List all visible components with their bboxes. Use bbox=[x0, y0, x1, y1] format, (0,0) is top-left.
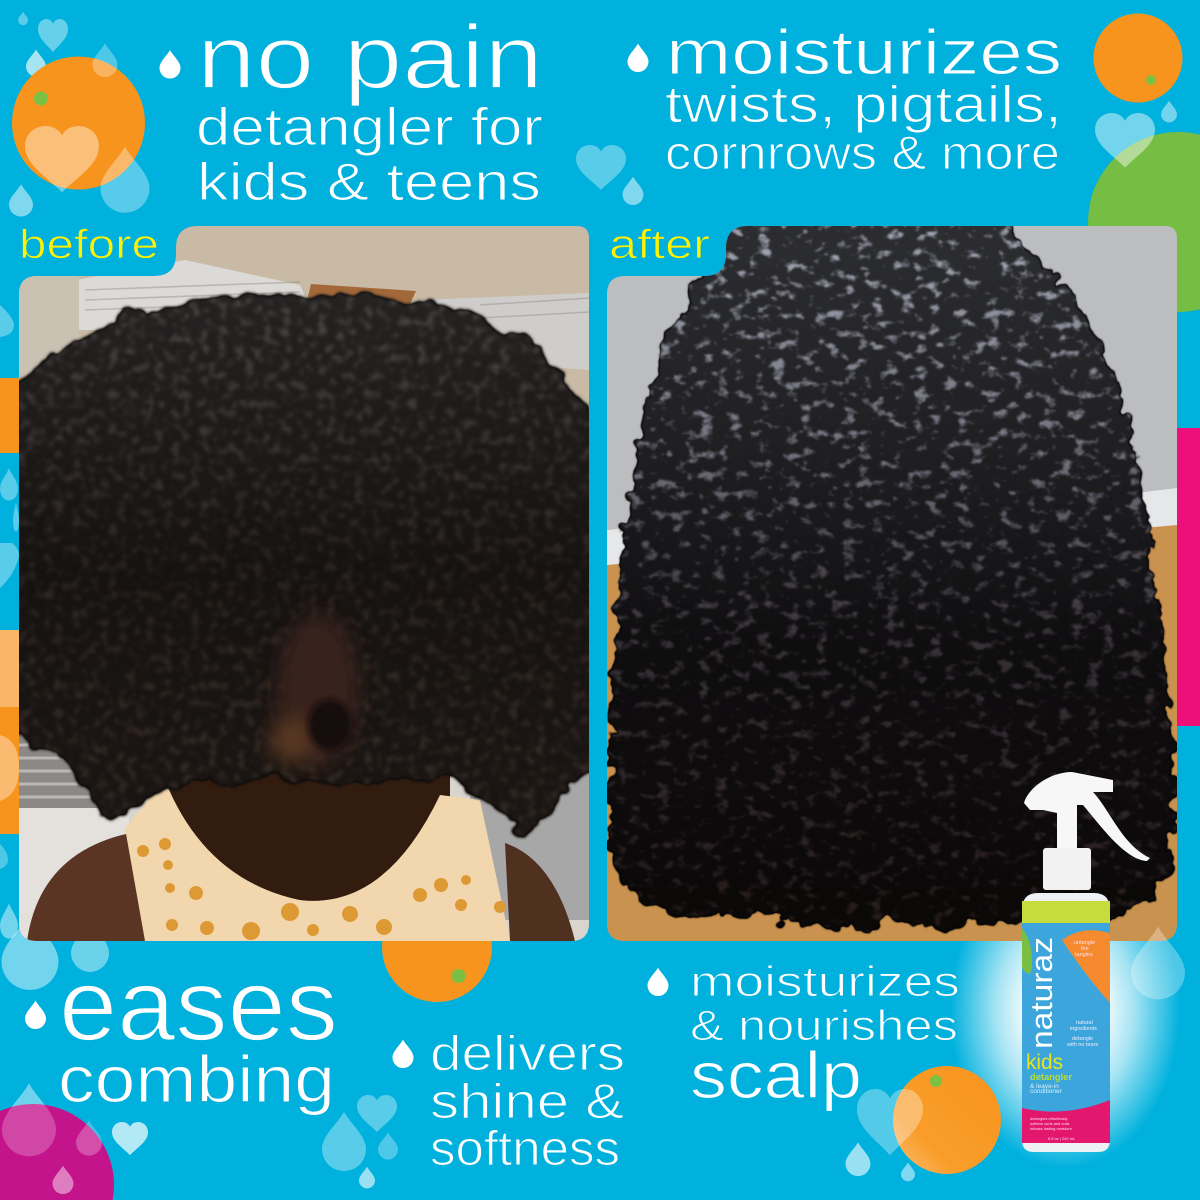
block: moisturizes scalp bbox=[648, 958, 960, 1112]
bottle body bbox=[1022, 893, 1110, 1152]
line: kids and teens: kids & teens bbox=[197, 153, 541, 212]
photo: before bbox=[5, 226, 600, 941]
bottle: naturaz kids detangler: kids bbox=[1026, 1051, 1063, 1074]
bottle pink panel bbox=[1022, 1100, 1110, 1143]
bottle: naturaz kids detangler: softens curls and coils bbox=[1030, 1121, 1069, 1126]
bottle: naturaz kids detangler: the bbox=[1081, 946, 1089, 952]
icon: water drop bbox=[628, 44, 648, 72]
bottle: naturaz kids detangler: detangle bbox=[1072, 1036, 1093, 1042]
decorative shapes: left edge bbox=[0, 305, 19, 939]
decorative shapes: top right bbox=[576, 14, 1200, 312]
bottle: naturaz kids detangler: tangles bbox=[1075, 952, 1093, 958]
icon: water drop bbox=[648, 968, 668, 996]
decorative shapes: orange by bottle bbox=[846, 926, 1185, 1181]
line: detangler for: detangler for bbox=[196, 98, 543, 157]
photo hair mass bbox=[609, 215, 1175, 928]
bottle glow bbox=[952, 941, 1178, 1165]
collar bbox=[1043, 848, 1091, 890]
photo: after bbox=[607, 215, 1177, 941]
decorative shape: pink right edge bbox=[1177, 428, 1200, 726]
bottle: naturaz kids detangler: detangles effortlessly bbox=[1030, 1116, 1068, 1121]
line: twists, pigtails,: twists, pigtails, bbox=[665, 76, 1062, 134]
bottle: naturaz kids detangler: & leave-in bbox=[1030, 1083, 1059, 1090]
bottle: naturaz kids detangler: untangle bbox=[1074, 940, 1095, 946]
photo skin neck and shoulders bbox=[27, 774, 575, 941]
line: and nourishes: & nourishes bbox=[690, 1002, 958, 1050]
block: no pain bbox=[160, 8, 543, 212]
photo hair comb bbox=[308, 284, 416, 304]
photo hair mass bbox=[5, 296, 600, 835]
line: shine and: shine & bbox=[430, 1075, 624, 1129]
line: scalp: scalp bbox=[690, 1038, 862, 1112]
bottle: naturaz kids detangler: ingredients bbox=[1070, 1026, 1097, 1032]
icon: water drop bbox=[160, 50, 180, 79]
bottle: naturaz kids detangler: natural bbox=[1076, 1020, 1093, 1026]
label: after: after bbox=[609, 221, 710, 267]
line: combing: combing bbox=[58, 1042, 335, 1116]
bottle orange panel bbox=[1062, 930, 1110, 1003]
bottle green accent bbox=[1022, 928, 1032, 974]
sprayer head bbox=[1024, 772, 1150, 861]
photo background wall and pillows bbox=[19, 226, 590, 941]
decorative shapes: bottom left bbox=[0, 913, 148, 1200]
block: delivers shine bbox=[392, 1027, 625, 1176]
block: moisturizes twists bbox=[628, 18, 1062, 179]
icon: water drop bbox=[25, 1001, 46, 1029]
line: delivers: delivers bbox=[430, 1027, 625, 1081]
bottle: naturaz kids detangler bbox=[1022, 772, 1150, 1152]
bottle: naturaz kids detangler: infuses lasting moisture bbox=[1030, 1126, 1073, 1131]
heading: no pain: no pain bbox=[197, 8, 543, 108]
label: before: before bbox=[19, 221, 159, 267]
photo background wall and floor bbox=[607, 226, 1177, 941]
decorative shapes: bottom centre bbox=[322, 892, 492, 1188]
bottle: naturaz kids detangler: detangler bbox=[1030, 1072, 1073, 1082]
line: cornrows and more: cornrows & more bbox=[665, 126, 1060, 179]
line: softness: softness bbox=[430, 1122, 620, 1176]
line: moisturizes: moisturizes bbox=[690, 958, 960, 1006]
bottle text: naturaz bbox=[1024, 937, 1059, 1049]
block: eases combing bbox=[25, 948, 338, 1116]
bottle: naturaz kids detangler: conditioner bbox=[1030, 1088, 1063, 1095]
photo face bbox=[270, 615, 358, 765]
icon: water drop bbox=[392, 1040, 414, 1068]
heading: eases: eases bbox=[59, 948, 338, 1062]
heading: moisturizes: moisturizes bbox=[666, 18, 1062, 88]
photo tank top with dots bbox=[125, 788, 510, 941]
bottle: naturaz kids detangler: 8 fl oz | 240 mL bbox=[1048, 1136, 1076, 1141]
decorative shapes: top left bbox=[9, 12, 150, 217]
bottle: naturaz kids detangler: with no tears bbox=[1066, 1042, 1098, 1048]
